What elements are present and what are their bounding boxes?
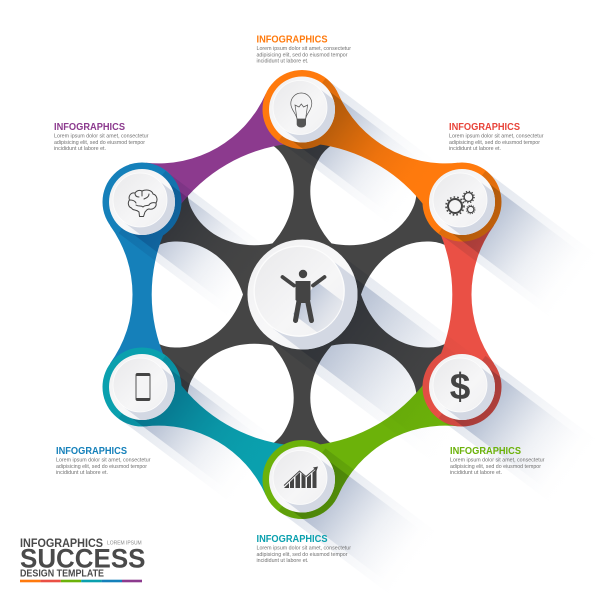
node: brain — [109, 169, 205, 258]
title block: success design template: INFOGRAPHICS — [20, 538, 103, 550]
node: chart — [269, 446, 365, 536]
text block: lower left — [56, 446, 151, 476]
title block: success design template: LOREM IPSUM — [107, 541, 142, 547]
text block: upper right: INFOGRAPHICS — [449, 122, 520, 133]
icon: lightbulb — [291, 93, 312, 128]
central disc with person — [248, 240, 358, 350]
text block: bottom: adipisicing elit, sed do eiusmod tempor — [256, 552, 348, 558]
text block: lower right: incididunt ut labore et. — [450, 470, 502, 476]
title block: success design template: DESIGN TEMPLATE — [20, 567, 104, 579]
text block: upper right: adipisicing elit, sed do eiusmod tempor — [449, 140, 540, 146]
text block: upper right — [449, 122, 544, 152]
icon: person with raised arms — [282, 270, 324, 320]
text block: upper left: adipisicing elit, sed do eiusmod tempor — [54, 140, 145, 146]
text block: upper right: Lorem ipsum dolor sit amet, consectetur — [449, 133, 544, 139]
node: phone — [109, 354, 205, 443]
text block: top: adipisicing elit, sed do eiusmod tempor — [256, 52, 348, 58]
text block: lower left: adipisicing elit, sed do eiusmod tempor — [56, 464, 147, 470]
text block: bottom: INFOGRAPHICS — [256, 534, 328, 545]
text block: top — [256, 35, 351, 65]
node: dollar — [429, 354, 525, 443]
text block: top: Lorem ipsum dolor sit amet, consectetur — [256, 46, 351, 52]
icon: gears — [446, 191, 475, 215]
text block: lower left: Lorem ipsum dolor sit amet, consectetur — [56, 457, 151, 463]
text block: lower right — [450, 446, 545, 476]
text block: bottom: Lorem ipsum dolor sit amet, consectetur — [256, 545, 351, 551]
text block: bottom: incididunt ut labore et. — [256, 558, 308, 564]
icon: dollar sign: $ — [450, 366, 471, 407]
person cast shadow — [293, 284, 342, 332]
text block: upper left: Lorem ipsum dolor sit amet, consectetur — [54, 133, 149, 139]
text block: lower right: adipisicing elit, sed do eiusmod tempor — [450, 464, 541, 470]
text block: upper left: INFOGRAPHICS — [54, 122, 125, 133]
dark central star — [142, 110, 462, 480]
text block: bottom — [256, 534, 351, 564]
text block: upper right: incididunt ut labore et. — [449, 146, 501, 152]
text block: top: incididunt ut labore et. — [256, 59, 308, 65]
text block: lower left: incididunt ut labore et. — [56, 470, 108, 476]
node: lightbulb — [269, 76, 365, 166]
title block: success design template: SUCCESS — [20, 543, 146, 573]
white petals — [142, 129, 462, 460]
rainbow bar — [20, 580, 142, 582]
icon: smartphone — [136, 374, 150, 400]
node: gears — [429, 169, 525, 258]
text block: top: INFOGRAPHICS — [256, 35, 328, 46]
text block: upper left: incididunt ut labore et. — [54, 146, 106, 152]
coloured node rings — [102, 70, 502, 519]
long shadows — [119, 78, 597, 595]
title block: success design template — [20, 538, 146, 582]
icon: rising bar chart — [284, 466, 318, 488]
text block: lower right: Lorem ipsum dolor sit amet, consectetur — [450, 457, 545, 463]
text block: lower left: INFOGRAPHICS — [56, 446, 127, 457]
coloured connector bands — [110, 82, 494, 507]
text block: lower right: INFOGRAPHICS — [450, 446, 521, 457]
text block: upper left — [54, 122, 149, 152]
icon: brain — [128, 190, 157, 216]
